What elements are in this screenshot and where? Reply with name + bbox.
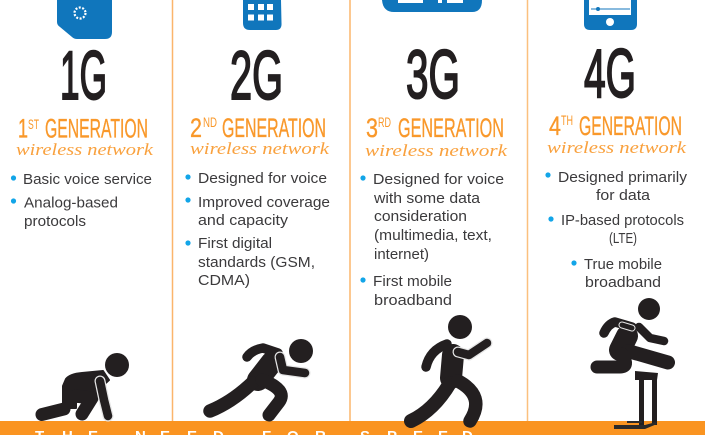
bullet list: 1G features: Analog-based <box>24 196 118 212</box>
bullet list: 3G features: internet) <box>374 247 429 263</box>
icon: runner accelerating <box>210 339 313 415</box>
bullet list: 4G features <box>545 170 688 291</box>
bullet list: 3G features: consideration <box>374 209 467 225</box>
bullet list: 2G features: CDMA) <box>198 273 250 289</box>
bullet list: 4G features: Designed primarily <box>558 170 688 186</box>
heading: 2G: 2G <box>230 37 283 114</box>
icon: 1G phone <box>57 0 112 39</box>
heading: 4G: 4G <box>584 35 636 112</box>
icon: runner in crouching start <box>42 353 129 416</box>
bullet list: 3G features: Designed for voice <box>373 172 504 188</box>
panel: 1G <box>11 0 154 416</box>
bullet list: 4G features: broadband <box>585 275 661 291</box>
heading: 3rd generation: RD <box>378 115 391 130</box>
heading: 2nd generation: ND <box>203 115 217 130</box>
bullet list: 4G features: True mobile <box>584 257 662 273</box>
icon: 4G smartphone <box>584 0 637 30</box>
bullet list: 2G features: Designed for voice <box>198 171 327 187</box>
bullet list: 2G features <box>185 171 330 289</box>
heading: 1st generation: ST <box>28 117 39 132</box>
subheading: wireless network: wireless network <box>16 140 154 159</box>
heading: 2nd generation: 2 <box>190 113 202 143</box>
icon: runner jumping a hurdle <box>597 298 668 429</box>
heading: 1st generation: GENERATION <box>45 114 148 144</box>
heading: 1st generation <box>18 114 148 144</box>
bullet list: 4G features: (LTE) <box>609 231 637 247</box>
bullet list: 3G features: broadband <box>374 293 452 309</box>
icon: 3G tablet <box>382 0 482 12</box>
bullet list: 1G features <box>11 172 152 230</box>
heading: 1G: 1G <box>60 37 107 114</box>
subheading: wireless network: wireless network <box>547 138 687 157</box>
bullet list: 2G features: Improved coverage <box>198 195 330 211</box>
bullet list: 3G features: (multimedia, text, <box>374 228 492 244</box>
subheading: wireless network: wireless network <box>365 141 508 160</box>
icon: runner sprinting <box>411 315 487 421</box>
heading: 3rd generation <box>366 113 504 143</box>
bullet list: 2G features: standards (GSM, <box>198 255 315 271</box>
heading: 4th generation: 4 <box>549 111 561 141</box>
bullet list: 3G features: First mobile <box>373 274 452 290</box>
bullet list: 1G features: Basic voice service <box>23 172 152 188</box>
icon: 2G keypad phone <box>243 0 282 30</box>
bullet list: 2G features: and capacity <box>198 213 289 229</box>
heading: 3rd generation: 3 <box>366 113 378 143</box>
heading: 4th generation: TH <box>561 113 573 128</box>
heading: 2nd generation: GENERATION <box>222 113 326 143</box>
panel: 2G <box>185 0 330 415</box>
bullet list: 3G features: with some data <box>373 191 481 207</box>
heading: 1st generation: 1 <box>18 114 28 144</box>
bullet list: 3G features <box>360 172 504 309</box>
heading: 3rd generation: GENERATION <box>398 113 504 143</box>
bullet list: 1G features: protocols <box>24 214 86 230</box>
heading: 3G: 3G <box>406 36 460 113</box>
bullet list: 4G features: for data <box>596 188 651 204</box>
bullet list: 2G features: First digital <box>198 236 272 252</box>
panel: 3G <box>360 0 508 421</box>
subheading: wireless network: wireless network <box>190 139 330 158</box>
heading: 2nd generation <box>190 113 326 143</box>
heading: 4th generation <box>549 111 682 141</box>
banner: the need for speed <box>0 421 705 435</box>
bullet list: 4G features: IP-based protocols <box>561 213 684 229</box>
panel: 4G <box>545 0 688 429</box>
